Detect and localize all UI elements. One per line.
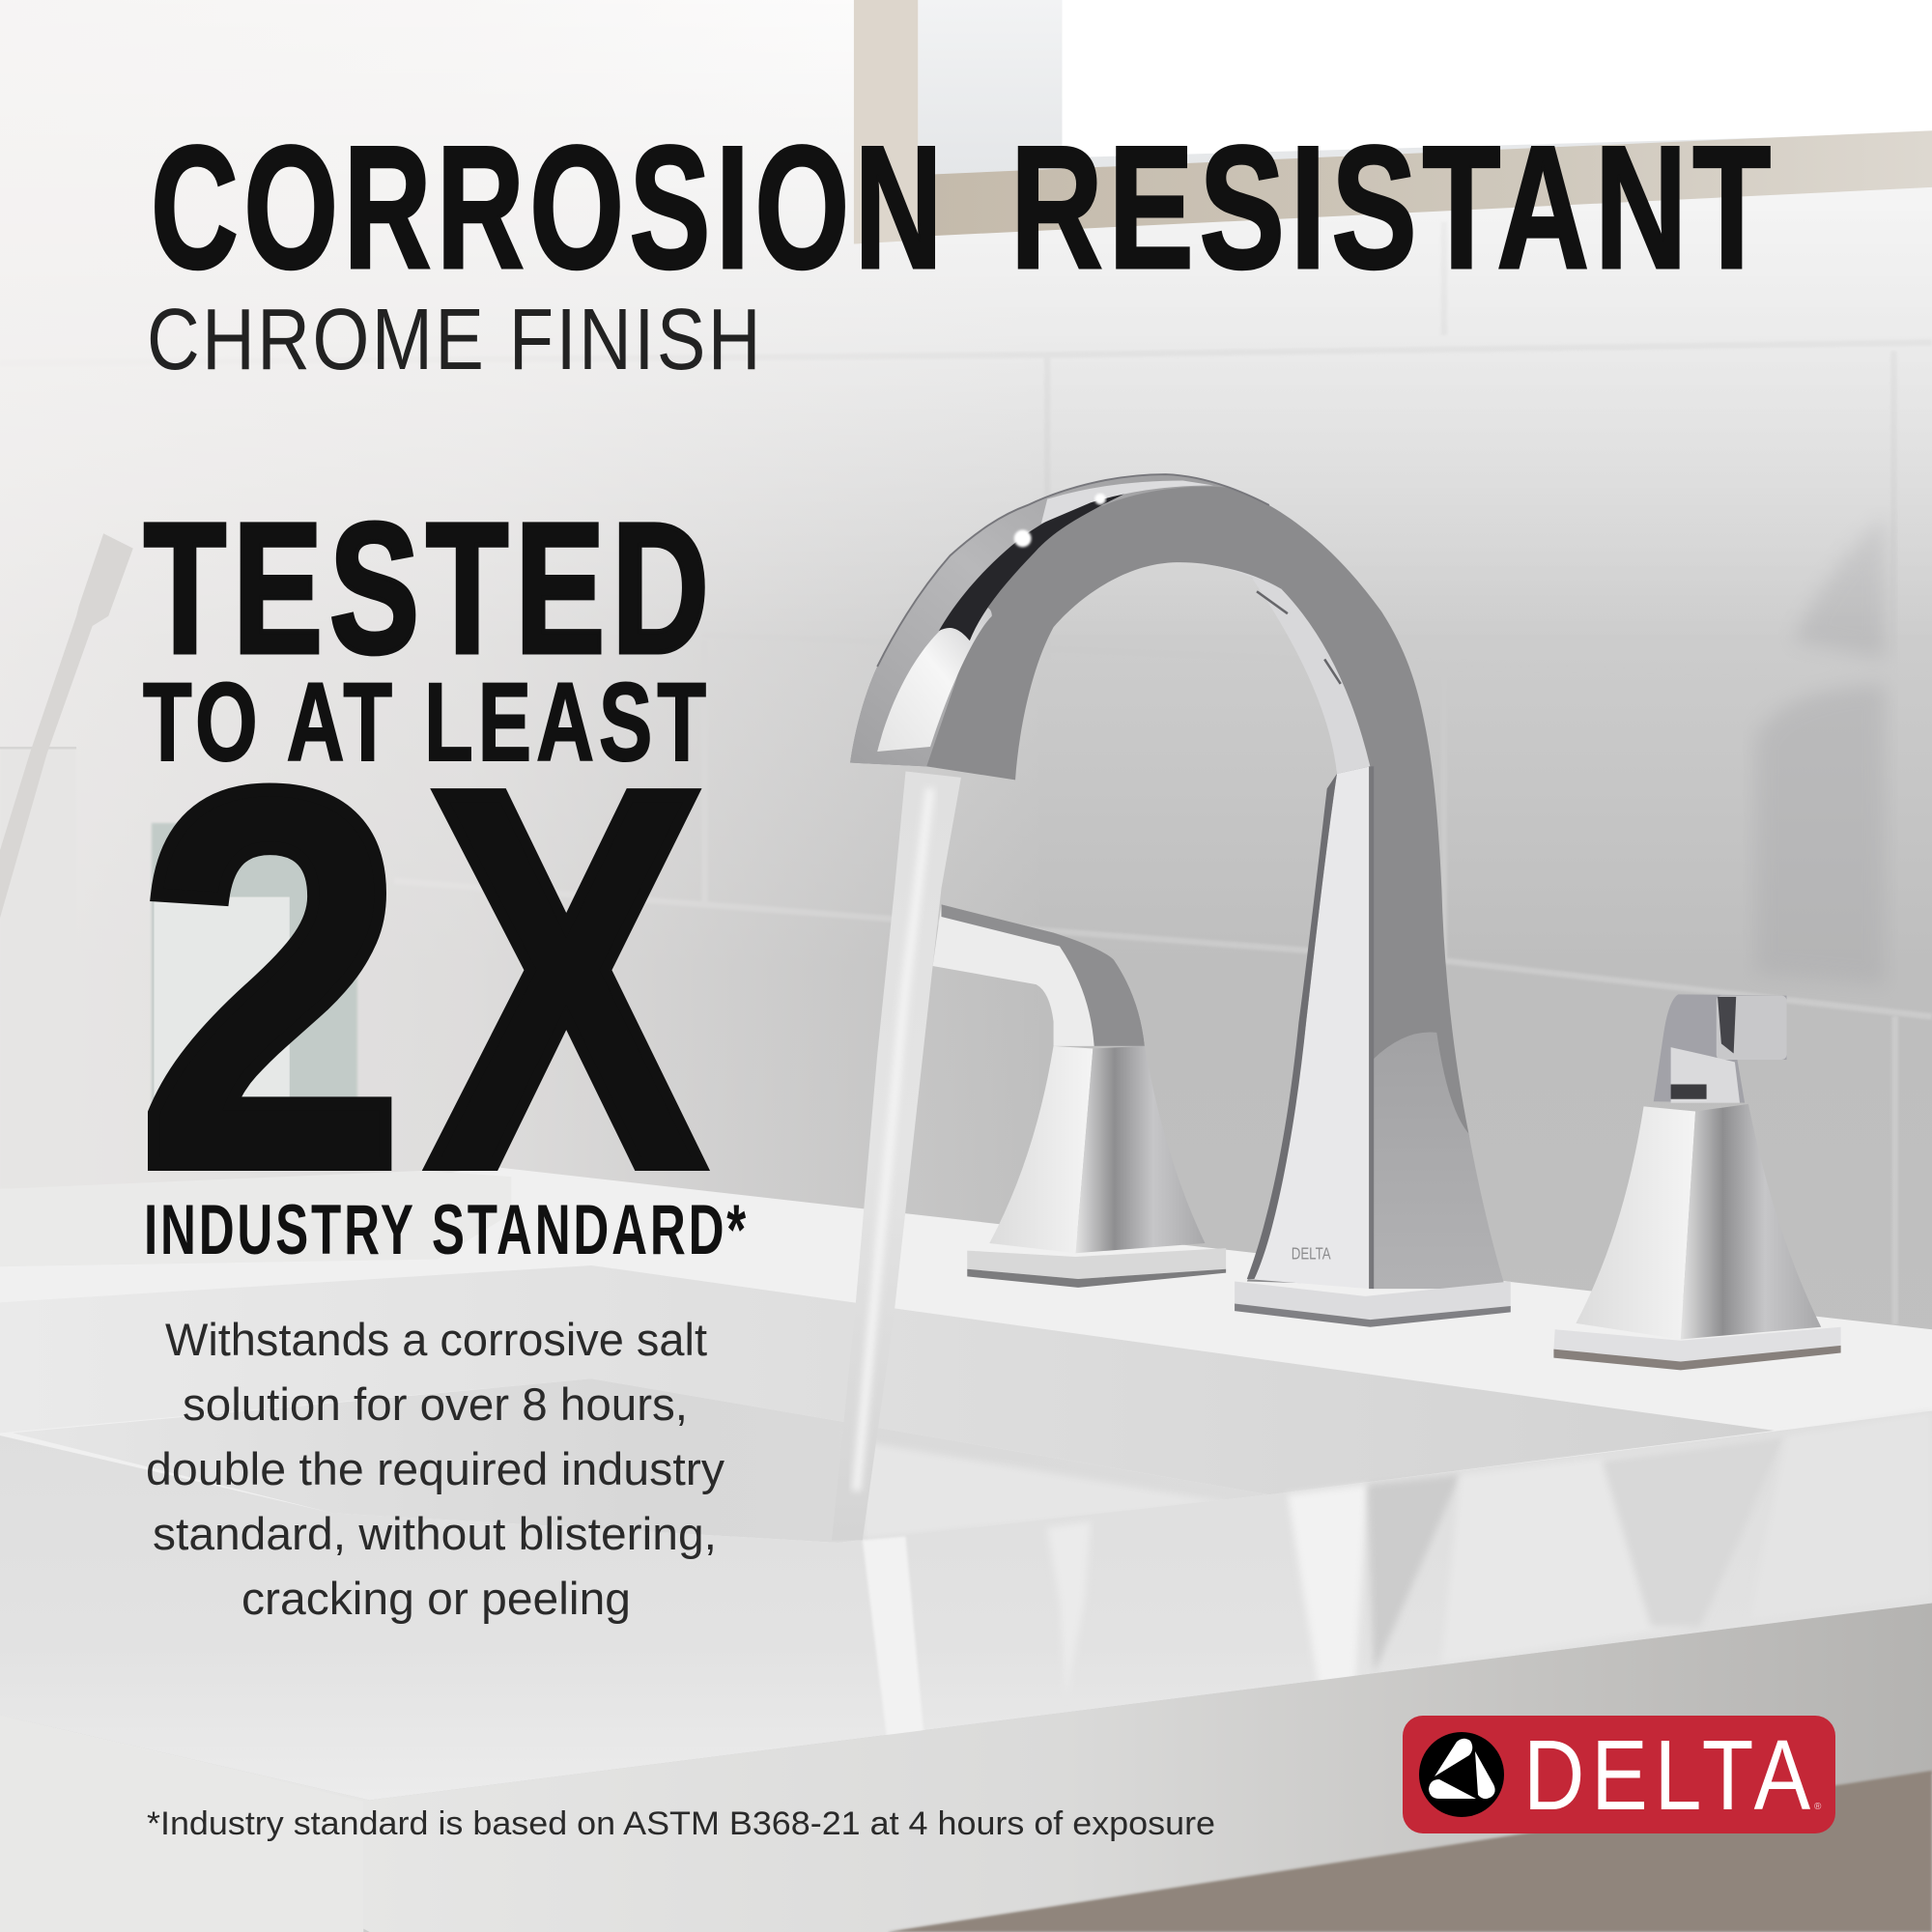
body text: solution for over 8 hours, [183,1378,688,1430]
counter and sink [0,1167,1932,1932]
footnote: *Industry standard is based on ASTM B368-21 at 4 hours of exposure [147,1805,1215,1842]
logo: delta: DELTA [1523,1719,1817,1831]
counter front bevel [0,1603,1932,1932]
sink back band [0,1265,1775,1494]
tray [0,1171,511,1266]
faucet brand mark: DELTA [1292,1244,1331,1264]
inner arch reflection [1166,563,1370,774]
left items: toothbrush, glass, bottle, tray [0,533,357,1189]
column bright face [1247,766,1370,1289]
logo: delta: ® [1814,1802,1822,1812]
icon: delta triangle mark [1429,1739,1495,1799]
big stat: 2X [137,679,706,1278]
body text: double the required industry [146,1443,724,1494]
logo: delta [1403,1716,1835,1833]
running water [832,771,961,1540]
body text: Withstands a corrosive salt [165,1314,707,1365]
heading: industry standard: INDUSTRY STANDARD* [144,1191,749,1269]
counter top surface [0,1167,1932,1627]
white fade overlays [0,0,1932,1355]
near counter surface [0,1410,1932,1801]
body text: standard, without blistering, [153,1508,717,1559]
subtitle: chrome finish: CHROME FINISH [147,292,763,388]
big stat: 2X: X [428,679,706,1278]
spout tip highlight [877,607,992,752]
mirror and wood frame [854,0,1932,244]
faucet handle: right [1553,994,1841,1370]
heading: to at least: TO AT LEAST [143,661,711,784]
cabinet below counter [887,1771,1932,1932]
body text: cracking or peeling [242,1573,631,1624]
sink interior [13,1378,1269,1543]
title: corrosion resistant: CORROSION [151,110,948,305]
faucet handle: left [933,904,1226,1288]
big stat: 2X: 2 [137,679,405,1278]
body text [146,1314,724,1624]
heading: tested: TESTED [144,484,716,692]
spout silver rim [850,474,1233,766]
dark reflection strip [939,483,1146,640]
faucet main spout [850,474,1511,1327]
